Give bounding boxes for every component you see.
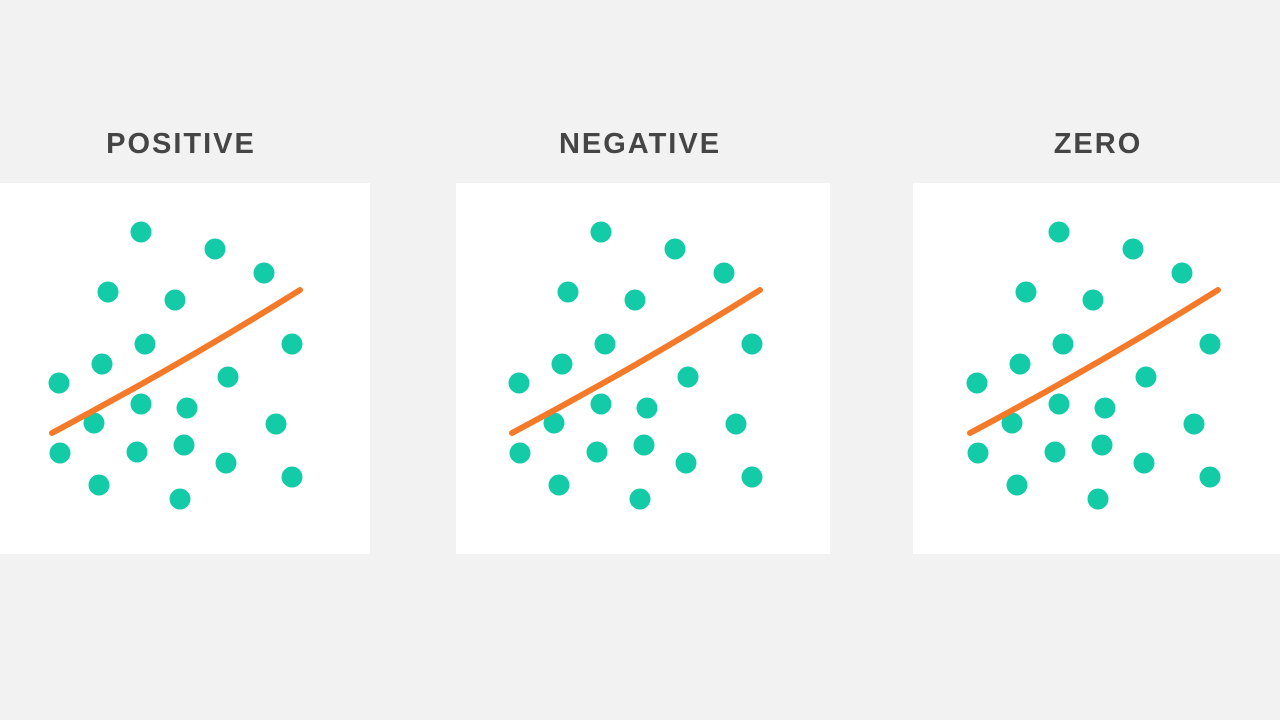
chart: zero scatter — [966, 222, 1220, 510]
title: zero: ZERO — [1054, 128, 1142, 160]
panel: zero — [913, 183, 1280, 554]
chart: positive scatter — [48, 222, 302, 510]
title: positive: POSITIVE — [106, 128, 256, 160]
panel: negative — [456, 183, 830, 554]
chart: negative scatter — [508, 222, 762, 510]
title: negative: NEGATIVE — [559, 128, 721, 160]
panel: positive — [0, 183, 370, 554]
